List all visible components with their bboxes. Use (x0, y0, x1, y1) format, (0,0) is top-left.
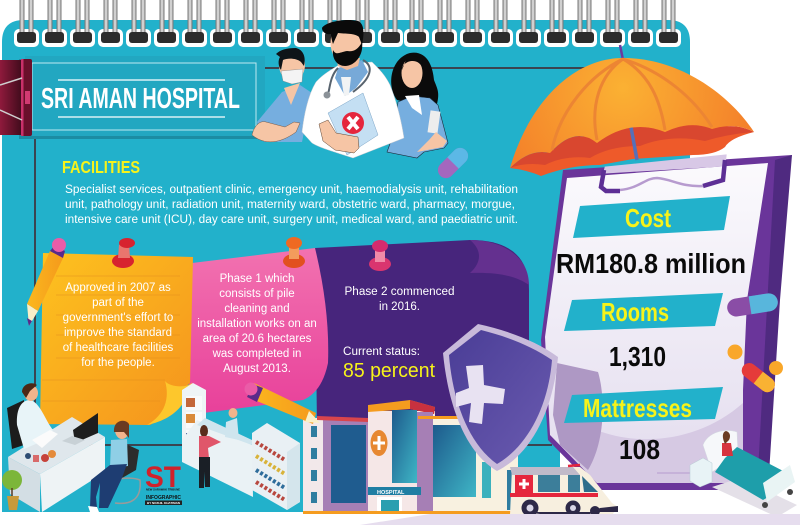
label: rooms: Rooms (601, 297, 669, 327)
text: facilities list: Specialist services, outpatient clinic, emergency unit, haemodialysis unit, rehabilitation (65, 184, 518, 196)
clip (601, 156, 725, 191)
capsule: blue and purple (435, 145, 471, 181)
text: 85 percent: 85 percent (343, 360, 435, 382)
illustration: hospital bed with patient (690, 431, 797, 517)
panel: purple note (315, 240, 529, 430)
spiral binding (14, 0, 681, 47)
text: approval: for the people. (81, 357, 155, 369)
right woman (387, 53, 448, 158)
text: facilities list (65, 184, 518, 226)
banner: mattresses (564, 387, 723, 423)
text: approval: improve the standard (64, 327, 172, 339)
text: current status: Current status: (343, 346, 420, 358)
decorative binding lines (35, 68, 590, 445)
capsule: purple and blue (726, 292, 779, 318)
icon: orange pin (283, 237, 305, 268)
potted plant (2, 470, 22, 510)
panel: yellow note (40, 253, 193, 425)
illustration: clipboard (541, 155, 792, 490)
value: cost: RM180.8 million (556, 248, 746, 279)
value: mattresses: 108 (619, 434, 660, 465)
text: phase 2: Phase 2 commenced (344, 286, 454, 298)
text: phase 1: area of 20.6 hectares (203, 333, 312, 345)
text: new sarawak tribune: NEW SARAWAK TRIBUNE (146, 488, 180, 492)
sign: hospital: HOSPITAL (377, 490, 405, 496)
capsule: red and yellow (739, 360, 778, 395)
panel: pink note (188, 248, 328, 415)
illustration: doctor at desk with patient (2, 383, 140, 512)
text: phase 2 (344, 286, 454, 313)
text: facilities list: intensive care unit (ICU), day care unit, surgery unit, medical ward, and paediatric unit. (65, 214, 518, 226)
banner: cost (573, 196, 730, 238)
patient in chair (88, 421, 140, 512)
text: phase 2: in 2016. (379, 301, 420, 313)
text: facilities list: unit, pathology unit, radiation unit, maternity ward, obstetric ward, pharmacy, morgue, (65, 199, 515, 211)
left nurse (252, 48, 312, 142)
text: approval: government's effort to (63, 312, 173, 324)
text: infographic: INFOGRAPHIC (146, 495, 181, 501)
text: credit: BY NOZHIL KHATIMAN (147, 501, 180, 505)
illustration: pharmacy counter (182, 383, 300, 510)
label: mattresses: Mattresses (583, 393, 692, 423)
ribbon clip (0, 59, 32, 136)
text: ST: ST (145, 461, 181, 494)
text: phase 1: August 2013. (223, 363, 291, 375)
text: approval: Approved in 2007 as (65, 282, 171, 294)
heading: facilities: FACILITIES (62, 157, 140, 177)
text: phase 1: was completed in (212, 348, 301, 360)
text: approval: part of the (92, 297, 144, 309)
decorative floor strip (360, 514, 800, 525)
logo: ST infographic (145, 461, 182, 505)
text: phase 1: consists of pile (219, 288, 295, 300)
illustration: medical staff trio (252, 20, 448, 158)
banner: rooms (564, 293, 723, 331)
title text: SRI AMAN HOSPITAL (41, 83, 240, 115)
icon: shield (443, 324, 558, 471)
icon: umbrella (510, 45, 754, 176)
text: phase 1: cleaning and (224, 303, 290, 315)
icon: orange balls (728, 344, 783, 375)
icon: red pin (112, 238, 135, 268)
title banner (0, 56, 265, 139)
text: approval (63, 282, 174, 369)
illustration: hospital building (303, 400, 518, 514)
text: approval: of healthcare facilities (63, 342, 174, 354)
text: phase 1: Phase 1 which (220, 273, 294, 285)
label: cost: Cost (625, 203, 671, 233)
value: rooms: 1,310 (609, 341, 666, 372)
text: phase 1: installation works on an (197, 318, 317, 330)
centre doctor (302, 20, 404, 158)
pencil on pink note (244, 382, 320, 424)
icon: pink pin (369, 240, 391, 271)
text: phase 1 (197, 273, 317, 375)
icon: pencil on yellow note (27, 238, 66, 326)
illustration: ambulance (510, 465, 618, 516)
